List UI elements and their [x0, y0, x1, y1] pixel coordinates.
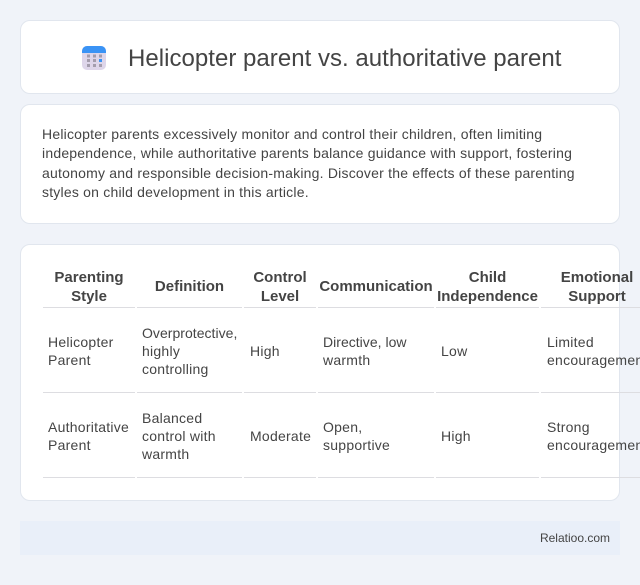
row: authoritative parent: Moderate: [250, 428, 311, 444]
table header row: Parenting: [54, 269, 124, 286]
footer bar: [20, 521, 620, 555]
intro text: styles on child development in this article.: [42, 184, 309, 200]
footer source text: Relatioo.com: [540, 531, 610, 545]
comparison table: [43, 269, 640, 478]
row: helicopter parent: Parent: [48, 352, 91, 368]
title: Helicopter parent vs. authoritative parent: [128, 45, 562, 72]
row: helicopter parent: Low: [441, 343, 467, 359]
row: authoritative parent: Strong: [547, 419, 590, 435]
intro text: Helicopter parents excessively monitor and control their children, often limiting: [42, 126, 542, 142]
row: authoritative parent: supportive: [323, 437, 390, 453]
row: helicopter parent: Helicopter: [48, 334, 114, 350]
intro card: [20, 104, 620, 224]
intro text: autonomy and responsible decision-making. Discover the effects of these parenting: [42, 165, 575, 181]
table header row: Emotional: [561, 269, 633, 286]
row: helicopter parent: highly: [142, 343, 180, 359]
intro text: [42, 126, 575, 200]
row: authoritative parent: Parent: [48, 437, 91, 453]
table header row: Independence: [437, 288, 538, 305]
row: authoritative parent: Authoritative: [48, 419, 129, 435]
table header row: Definition: [155, 278, 224, 295]
row: helicopter parent: controlling: [142, 361, 209, 377]
table header row: Support: [568, 288, 626, 305]
table header row: Child: [469, 269, 506, 286]
row: authoritative parent: Balanced: [142, 410, 202, 426]
table header row: Control: [253, 269, 307, 286]
row: authoritative parent: Open,: [323, 419, 362, 435]
table card: [20, 244, 620, 501]
row: helicopter parent: Directive, low: [323, 334, 407, 350]
title card: [20, 20, 620, 94]
table header row: Communication: [319, 278, 433, 295]
row: helicopter parent: High: [250, 343, 280, 359]
table header row: Style: [71, 288, 107, 305]
row: helicopter parent: warmth: [323, 352, 370, 368]
table header row: Level: [261, 288, 299, 305]
row: helicopter parent: Overprotective,: [142, 325, 237, 341]
intro text: independence, while authoritative parents balance guidance with support, fostering: [42, 145, 572, 161]
row: authoritative parent: [48, 410, 640, 462]
table header row: [54, 269, 633, 305]
row: authoritative parent: warmth: [142, 446, 189, 462]
icon: calendar: [82, 46, 106, 70]
row: helicopter parent: Limited: [547, 334, 594, 350]
row: authoritative parent: High: [441, 428, 471, 444]
row: helicopter parent: [48, 325, 640, 377]
row: authoritative parent: control with: [142, 428, 216, 444]
